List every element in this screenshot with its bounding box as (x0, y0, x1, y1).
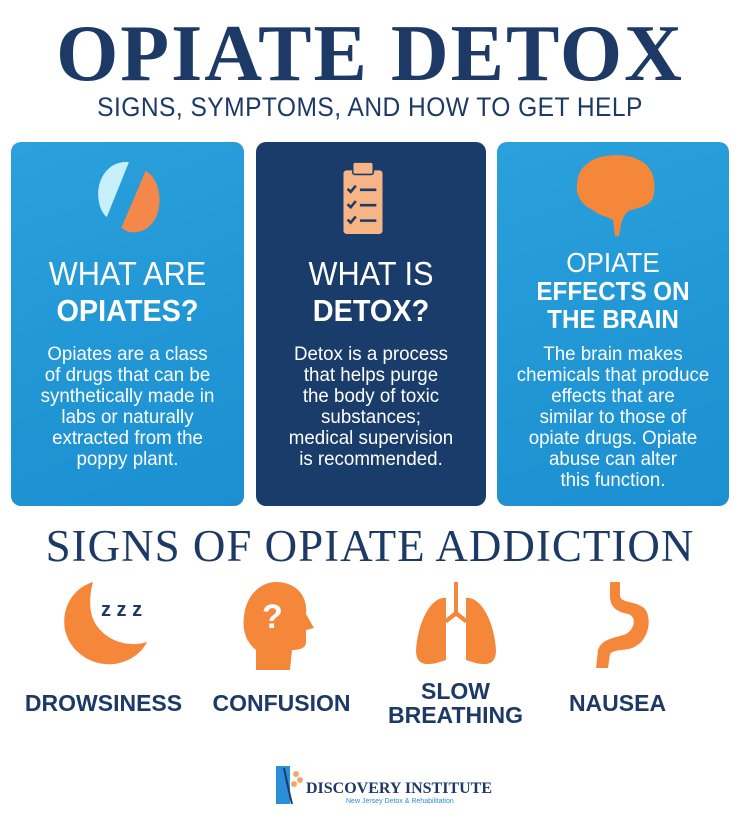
label: slow breathing: BREATHING (388, 702, 523, 728)
text: effects that are (551, 385, 675, 407)
icon: moon (64, 582, 147, 664)
text: that helps purge (304, 364, 438, 386)
text: the body of toxic (303, 385, 439, 407)
panel: effects on brain (497, 142, 729, 506)
icon: head with question: ? (262, 598, 283, 636)
icon: clipboard (344, 162, 382, 234)
icon: lungs (416, 582, 496, 664)
text: opiate drugs. Opiate (529, 427, 697, 449)
heading: DETOX? (313, 293, 429, 328)
label: drowsiness: DROWSINESS (25, 690, 182, 716)
logo (276, 766, 492, 805)
heading: OPIATE (566, 247, 660, 278)
logo text: DISCOVERY INSTITUTE (306, 780, 492, 797)
icon: pill (98, 162, 160, 232)
subtitle: SIGNS, SYMPTOMS, AND HOW TO GET HELP (97, 92, 643, 122)
panel: what is detox (256, 142, 486, 506)
label: nausea: NAUSEA (569, 690, 666, 716)
icon: brain (576, 155, 654, 236)
text: The brain makes (543, 343, 683, 365)
icon: logo tree (276, 766, 303, 804)
heading (48, 255, 206, 328)
logo: New Jersey Detox & Rehabilitation (346, 798, 454, 805)
heading: signs of addiction: SIGNS OF OPIATE ADDICTION (46, 521, 694, 571)
heading: WHAT ARE (49, 255, 206, 292)
label: confusion: CONFUSION (212, 690, 350, 716)
heading: OPIATES? (56, 293, 199, 328)
icon: head with question (244, 582, 314, 670)
heading (308, 255, 434, 328)
heading (536, 247, 690, 334)
icon: moon: z z z (101, 599, 142, 621)
label: slow breathing (388, 678, 523, 728)
text (517, 343, 709, 491)
text: synthetically made in (41, 385, 214, 407)
text: medical supervision (289, 427, 453, 449)
text: abuse can alter (549, 448, 677, 470)
heading: EFFECTS ON (536, 276, 690, 306)
text (41, 343, 214, 470)
text: labs or naturally (61, 406, 194, 428)
heading: THE BRAIN (547, 304, 679, 334)
text: chemicals that produce (517, 364, 709, 386)
text: of drugs that can be (45, 364, 210, 386)
panel: what are opiates (11, 142, 244, 506)
icon: stomach (596, 582, 649, 668)
title: OPIATE DETOX (56, 10, 684, 98)
text (289, 343, 453, 470)
heading: WHAT IS (308, 255, 434, 292)
text: substances; (321, 406, 421, 428)
text: is recommended. (299, 448, 443, 470)
text: Detox is a process (294, 343, 448, 365)
text: poppy plant. (76, 448, 178, 470)
text: Opiates are a class (47, 343, 208, 365)
text: similar to those of (540, 406, 686, 428)
text: this function. (560, 469, 666, 491)
text: extracted from the (52, 427, 203, 449)
label: slow breathing: SLOW (421, 678, 490, 704)
